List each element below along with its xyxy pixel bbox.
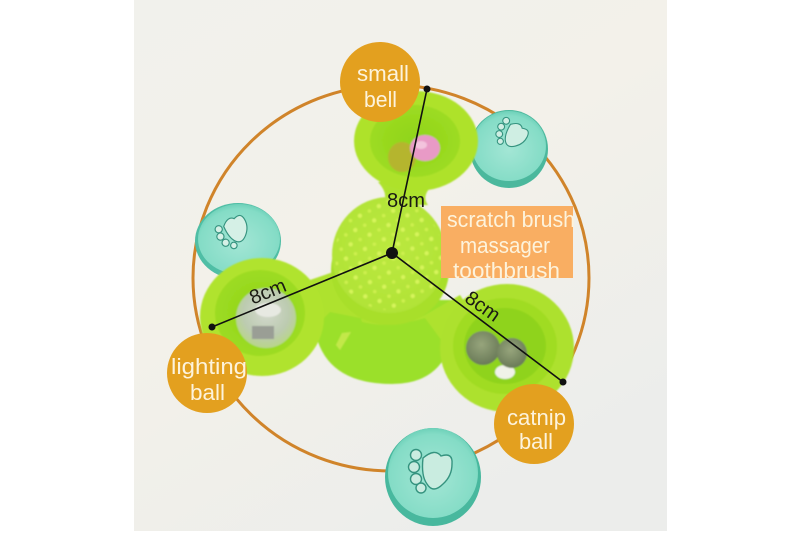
callout: catnip ball: ball [519,429,553,454]
cap: bottom [385,428,481,526]
photo background [134,0,667,531]
ring [193,85,589,471]
catnip balls [466,331,527,379]
cup: right [440,284,574,412]
measure label: top: 8cm [387,190,425,212]
callout: small bell: bell [364,87,397,112]
arm connectors [310,182,480,345]
label panel: features: scratch brush [447,207,575,232]
label panel: features [441,206,575,283]
callout: lighting ball [167,333,247,413]
measure lines [208,86,566,386]
toy [200,91,574,412]
callout: catnip ball: catnip [507,405,566,430]
callout: catnip ball [494,384,574,464]
callout: lighting ball: lighting [171,354,247,379]
cup: left [200,258,324,376]
lighting ball [236,288,296,348]
hub skirt [331,215,449,325]
suction base [316,300,452,384]
callout: lighting ball: ball [190,380,225,405]
label panel: features: massager [460,233,550,258]
spike [336,332,351,350]
callout: small bell [340,42,420,122]
measure label: left: 8cm [246,275,290,309]
hub [332,197,446,313]
callout: small bell: small [357,61,409,86]
cup: top [354,91,478,191]
cap: upper right [470,110,548,188]
label panel: features: toothbrush [453,258,560,283]
cap: left [195,203,281,279]
small bells [388,135,440,172]
measure label: right: 8cm [461,287,504,327]
